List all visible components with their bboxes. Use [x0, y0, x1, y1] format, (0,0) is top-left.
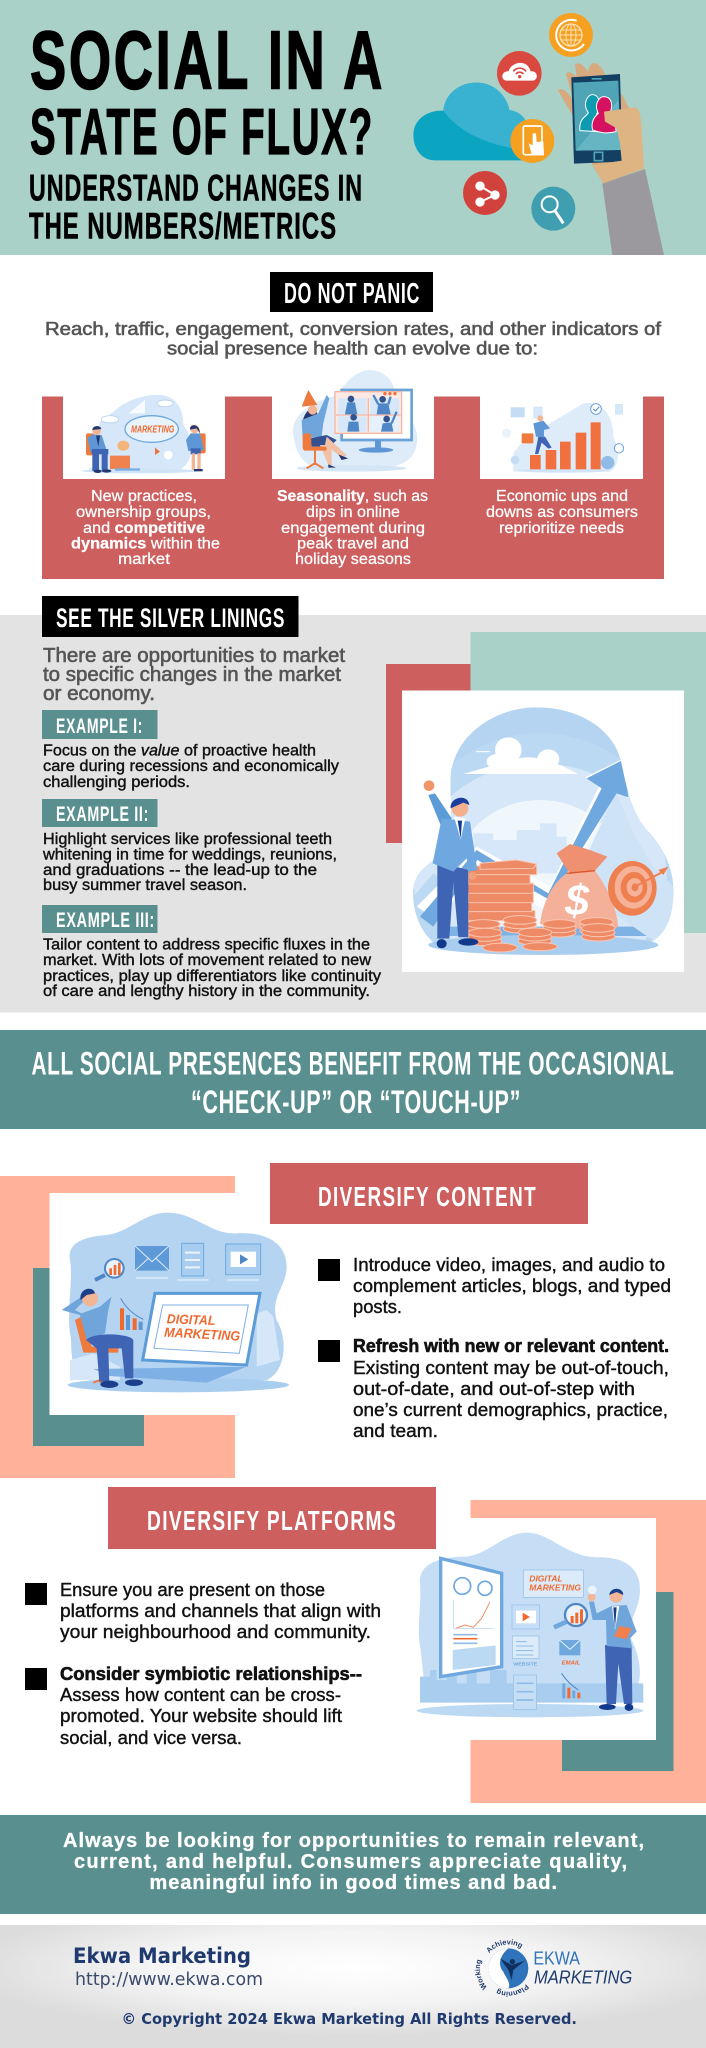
title: STATE OF FLUX? — [30, 95, 374, 168]
businessman — [424, 780, 478, 948]
bullet: ensure presence: platforms and channels that align with — [60, 1601, 381, 1621]
icon: mobile tap — [510, 119, 554, 163]
laptop: MARKETING — [164, 1325, 241, 1344]
example III: Tailor content to address specific fluxes in the — [43, 936, 370, 954]
businessman presenting — [588, 1586, 637, 1711]
example III — [42, 905, 381, 1000]
example II — [42, 799, 337, 894]
intro text: There are opportunities to market — [43, 645, 345, 667]
example II: Highlight services like professional teeth — [43, 831, 332, 848]
icon: globe — [549, 13, 593, 57]
example II: busy summer travel season. — [43, 877, 247, 894]
company name and url: Ekwa Marketing — [73, 1944, 251, 1968]
title: SOCIAL IN A — [30, 14, 385, 106]
example I — [42, 710, 339, 791]
intro text: Reach, traffic, engagement, conversion rates, and other indicators of — [45, 319, 662, 339]
icon: magnifier — [531, 187, 575, 231]
heading: diversify platforms: DIVERSIFY PLATFORMS — [147, 1505, 397, 1536]
image frame with colour blocks — [415, 1500, 706, 1803]
example I: challenging periods. — [43, 774, 190, 791]
bullet: introduce video: posts. — [353, 1297, 402, 1317]
bullet: introduce video — [318, 1255, 671, 1317]
heading: do not panic — [270, 272, 433, 312]
illustration: digital marketing dashboard: MARKETING — [529, 1583, 582, 1593]
bullet: refresh content: Refresh with new or relevant content. — [353, 1336, 669, 1356]
caption: peak travel and — [297, 536, 409, 552]
panel: see the silver linings — [0, 596, 706, 1013]
money bag: $ — [564, 877, 590, 925]
bullet: refresh content: Existing content may be out-of-touch, — [353, 1358, 669, 1378]
example III: EXAMPLE III: — [56, 909, 155, 932]
illustration: businessman with money and growth arrow — [413, 708, 674, 955]
bullet: symbiotic relationships: Assess how content can be cross- — [60, 1685, 341, 1705]
example III: practices, play up differentiators like continuity — [43, 968, 381, 985]
section: diversify content — [0, 1163, 671, 1478]
laptop — [93, 1293, 260, 1383]
bullet: symbiotic relationships: Consider symbiotic relationships-- — [60, 1664, 362, 1684]
example II: EXAMPLE II: — [56, 803, 149, 826]
company name and url: http://www.ekwa.com — [75, 1969, 263, 1990]
heading: do not panic: DO NOT PANIC — [284, 278, 420, 310]
target — [608, 861, 668, 916]
dashboard board — [441, 1558, 502, 1677]
subtitle: THE NUMBERS/METRICS — [29, 206, 337, 246]
bullet: introduce video: complement articles, blogs, and typed — [353, 1276, 671, 1296]
intro text — [43, 645, 345, 705]
title — [30, 14, 385, 168]
closing banner: Always be looking for opportunities to remain relevant, — [63, 1830, 644, 1852]
heading: see the silver linings — [42, 596, 298, 637]
bullet: ensure presence: your neighbourhood and community. — [60, 1622, 371, 1642]
copyright: © Copyright 2024 Ekwa Marketing All Rights Reserved. — [122, 2010, 577, 2028]
bullet: refresh content: out-of-date, and out-of-step with — [353, 1379, 635, 1399]
banner: check-up or touch-up: “CHECK-UP” OR “TOUCH-UP” — [191, 1084, 521, 1120]
red panel background — [42, 396, 664, 579]
intro text: social presence health can evolve due to: — [167, 338, 538, 358]
bullet: introduce video: Introduce video, images, and audio to — [353, 1255, 665, 1275]
caption — [486, 488, 638, 537]
subtitle — [29, 168, 363, 246]
example I: Focus on the value of proactive health — [43, 742, 316, 760]
caption — [277, 488, 428, 568]
bullet: refresh content — [318, 1336, 669, 1441]
closing banner — [0, 1815, 706, 1914]
illustration: digital marketing laptop — [62, 1213, 289, 1392]
footer — [0, 1925, 706, 2048]
bullet: ensure presence: Ensure you are present on those — [60, 1580, 325, 1600]
man relaxing — [62, 1289, 143, 1388]
money bag — [540, 844, 618, 929]
example II: whitening in time for weddings, reunions, — [42, 846, 337, 864]
caption: New practices, — [91, 488, 197, 505]
example III: market. With lots of movement related to new — [43, 952, 372, 969]
bullet: refresh content: and team. — [353, 1421, 438, 1441]
caption: dips in online — [306, 504, 400, 521]
card: economic ups and downs — [480, 396, 643, 537]
illustration: marketing meeting — [82, 395, 206, 473]
card: new practices — [63, 395, 225, 568]
coins — [467, 916, 615, 952]
caption: dynamics within the — [71, 536, 220, 552]
hand and phone — [558, 63, 664, 255]
logo: ekwa marketing: MARKETING — [534, 1966, 632, 1987]
bullet: ensure presence — [25, 1580, 381, 1642]
image frame with colour blocks — [386, 632, 706, 972]
heading: diversify content — [270, 1163, 588, 1224]
section: diversify platforms — [25, 1487, 706, 1803]
icon: cloud — [413, 83, 527, 160]
caption — [71, 488, 220, 568]
example II: and graduations -- the lead-up to the — [43, 862, 317, 879]
heading: diversify content: DIVERSIFY CONTENT — [318, 1181, 537, 1212]
panel: do not panic — [42, 272, 664, 579]
logo: ekwa marketing: Achieving — [487, 1939, 522, 1954]
content tiles: EMAIL — [562, 1660, 580, 1666]
content tiles: WEBSITE — [513, 1661, 537, 1666]
logo: ekwa marketing: Working — [474, 1960, 486, 1990]
closing banner: current, and helpful. Consumers appreciate quality, — [74, 1851, 627, 1873]
subtitle: UNDERSTAND CHANGES IN — [29, 168, 363, 208]
caption: market — [118, 551, 171, 568]
bullet: symbiotic relationships: social, and vice versa. — [60, 1728, 242, 1748]
logo: ekwa marketing: Planning — [496, 1984, 529, 1997]
stack of bills — [467, 860, 537, 921]
clouds — [463, 737, 578, 774]
closing banner: meaningful info in good times and bad. — [150, 1872, 557, 1894]
illustration: cloud, icons and hand holding phone — [413, 13, 664, 255]
content tiles — [512, 1604, 587, 1709]
caption: engagement during — [281, 520, 425, 537]
logo: ekwa marketing: EKWA — [533, 1947, 580, 1968]
example I: care during recessions and economically — [43, 758, 339, 775]
caption: reprioritize needs — [499, 520, 624, 537]
company name and url — [73, 1944, 263, 1990]
caption: and competitive — [83, 520, 205, 537]
caption: downs as consumers — [486, 504, 638, 521]
heading: diversify platforms — [108, 1487, 436, 1549]
envelope — [135, 1246, 169, 1271]
illustration: video call party — [293, 370, 417, 472]
intro text: or economy. — [43, 683, 155, 705]
banner: check-up or touch-up — [0, 1030, 706, 1129]
card: seasonality — [272, 370, 434, 568]
bullet: refresh content: one’s current demographics, practice, — [353, 1400, 668, 1420]
example III: of care and lengthy history in the community. — [43, 983, 370, 1000]
bullet: symbiotic relationships: promoted. Your website should lift — [60, 1706, 342, 1726]
illustration: digital marketing dashboard — [417, 1533, 643, 1717]
caption: holiday seasons — [295, 551, 411, 568]
caption: Seasonality, such as — [277, 488, 428, 505]
caption: ownership groups, — [76, 504, 211, 521]
example I: EXAMPLE I: — [56, 715, 143, 738]
bullet: symbiotic relationships — [25, 1664, 362, 1748]
icon: share — [463, 171, 507, 215]
illustration: growth bars — [502, 403, 624, 473]
intro text: to specific changes in the market — [43, 664, 341, 686]
image frame with colour blocks — [0, 1176, 289, 1478]
caption: Economic ups and — [496, 488, 628, 505]
header banner — [0, 0, 706, 255]
laptop: DIGITAL — [167, 1311, 216, 1328]
intro text — [45, 319, 662, 358]
heading: see the silver linings: SEE THE SILVER LININGS — [56, 603, 285, 633]
illustration: digital marketing dashboard: DIGITAL — [529, 1573, 563, 1583]
illustration: marketing meeting: MARKETING — [131, 425, 174, 436]
logo: ekwa marketing — [474, 1939, 632, 1997]
icon: wifi cloud — [497, 51, 542, 96]
